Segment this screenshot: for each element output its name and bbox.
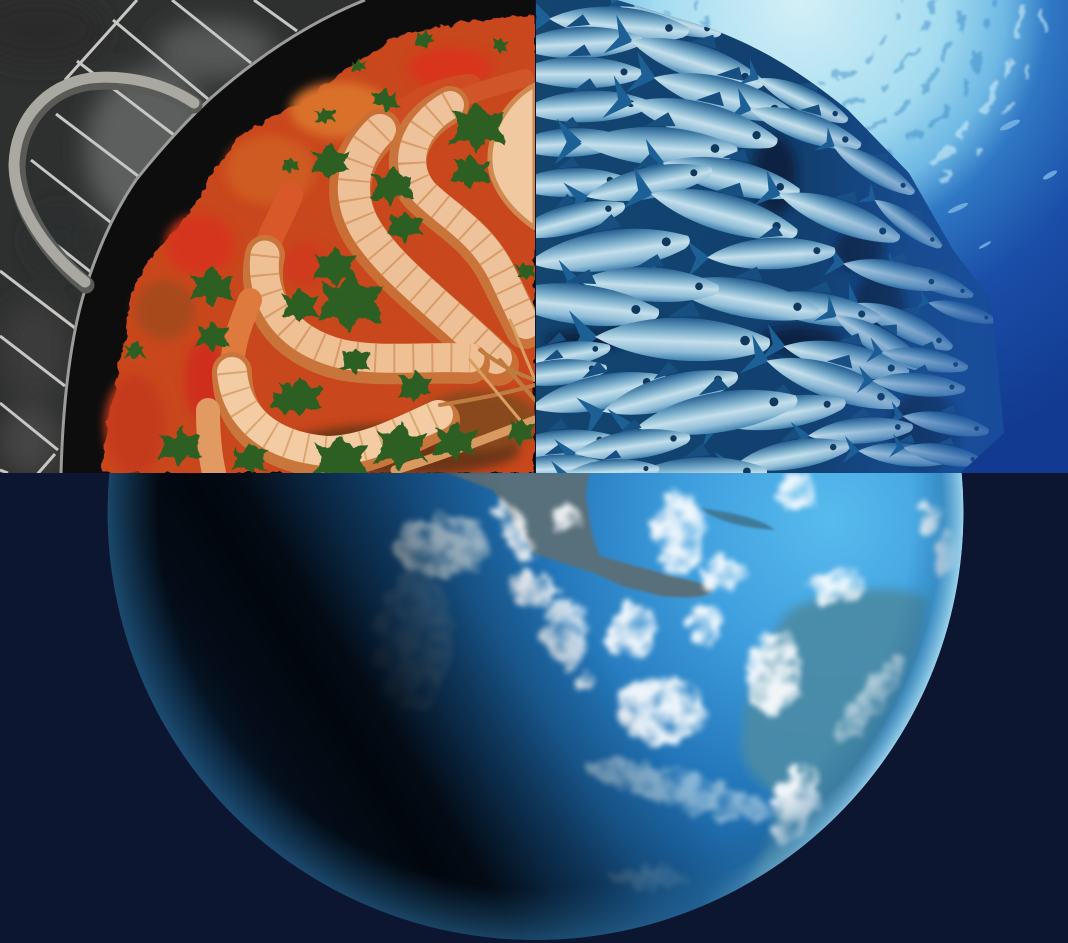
- limb glow: [108, 473, 964, 940]
- south america landmass: [742, 589, 928, 890]
- prawn: middle: [263, 195, 470, 364]
- dark gaps between fish: [545, 135, 960, 470]
- fish school: [536, 0, 994, 473]
- grill wires: [0, 0, 297, 478]
- chopped parsley: [124, 30, 535, 487]
- night side shadow: [108, 473, 710, 940]
- photo: planet earth: [108, 473, 964, 940]
- school shadow: [536, 0, 1004, 473]
- clouds: [376, 475, 957, 890]
- prawn: upper right: [408, 78, 526, 330]
- prawn: right edge: [490, 85, 535, 228]
- sea surface ripples: [663, 0, 998, 156]
- prawn: lower: [232, 300, 440, 458]
- grill surface texture: [0, 0, 275, 475]
- lit limb on the right: [713, 473, 964, 901]
- food base: [103, 15, 535, 473]
- icon: pan handle: [14, 77, 194, 285]
- photo: school of fish underwater: [536, 0, 1068, 473]
- flecks of light in deep water: [947, 118, 1058, 250]
- north america landmass: [448, 473, 775, 597]
- white flecks at the edge of the light zone: [906, 4, 1050, 184]
- photo: paella pan with prawns: [0, 0, 540, 487]
- pan rim: [61, 0, 535, 473]
- globe: [108, 473, 964, 940]
- blue fade over the far side of the school: [814, 104, 996, 473]
- prawn: bottom tail: [208, 410, 214, 473]
- prawns: [208, 78, 535, 473]
- sauce and tomato patches: [105, 48, 540, 476]
- prawn: centre: [350, 86, 498, 365]
